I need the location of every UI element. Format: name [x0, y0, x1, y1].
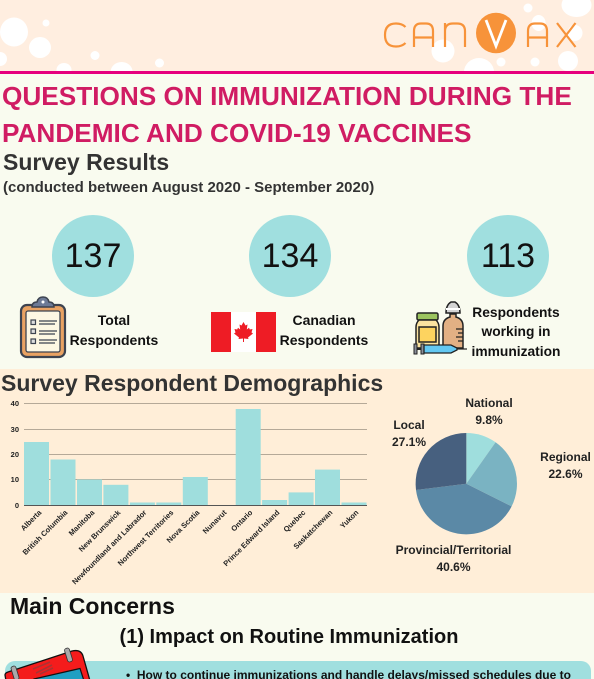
stat: 113 respondents in immunization [467, 215, 549, 297]
pie chart: respondent level: 9.8% [475, 413, 503, 427]
bar chart: respondents by province: 40 [11, 399, 19, 408]
bar chart: respondents by province: 30 [11, 425, 19, 434]
bar chart: respondents by province: Yukon [338, 508, 361, 530]
label: total respondents [70, 312, 158, 348]
heading: demographics: Survey Respondent Demographics [1, 370, 383, 396]
pie chart: respondent level: Regional [540, 450, 591, 464]
bar chart: respondents by province: Northwest Territories [116, 508, 175, 568]
stat: 113 respondents in immunization: 113 [481, 237, 535, 275]
label: canadian respondents: Canadian [292, 312, 356, 328]
bar chart: respondents by province: Manitoba [67, 507, 97, 538]
stat: 137 total respondents: 137 [65, 237, 121, 275]
bar chart: respondents by province: Saskatchewan [291, 508, 335, 551]
bar chart: respondents by province: Ontario [229, 508, 255, 533]
icon: vaccine bottles and syringe [414, 301, 467, 354]
label: respondents working in immunization: immunization [472, 344, 560, 359]
header banner [0, 0, 594, 72]
bar chart: respondents by province: British Columbia [21, 507, 70, 557]
label: respondents working in immunization: Respondents [472, 305, 560, 320]
pie chart: respondent level: 27.1% [392, 435, 426, 449]
header bubbles and Canvax logo [0, 0, 592, 71]
title: QUESTIONS ON IMMUNIZATION DURING THE [2, 81, 572, 111]
stat: 134 canadian respondents [249, 215, 331, 297]
panel: survey respondent demographics [0, 369, 594, 593]
bar chart: respondents by province: Quebec [282, 508, 307, 534]
bar chart: respondents by province: Nova Scotia [165, 507, 202, 545]
bar chart: respondents by province: New Brunswick [77, 507, 123, 554]
pie chart: respondent level: Local [393, 418, 425, 432]
bar chart: respondents by province: 0 [15, 501, 19, 510]
label: total respondents: Total [98, 312, 130, 328]
title [2, 81, 572, 148]
pie chart: respondent level: 40.6% [436, 560, 471, 574]
icon: clipboard [20, 296, 66, 358]
bar chart: respondents by province: Alberta [19, 507, 44, 533]
stat: 137 total respondents [52, 215, 134, 297]
label: respondents working in immunization [472, 305, 560, 359]
icon: calendar [4, 648, 90, 679]
pie chart: respondent level: 22.6% [548, 467, 583, 481]
bar chart: respondents by province: 20 [11, 450, 19, 459]
title: PANDEMIC AND COVID-19 VACCINES [2, 118, 471, 148]
label: canadian respondents: Respondents [280, 332, 368, 348]
bar chart: respondents by province: Nunavut [201, 508, 229, 536]
icon: Canadian flag [211, 312, 276, 352]
label: total respondents: Respondents [70, 332, 158, 348]
pie chart: respondent level: Provincial/Territorial [396, 543, 511, 557]
survey dates: (conducted between August 2020 - September 2020) [3, 179, 374, 196]
heading: main concerns: Main Concerns [10, 593, 175, 619]
bar chart: respondents by province: 10 [11, 475, 19, 484]
subheading: impact on routine immunization: (1) Impact on Routine Immunization [120, 626, 458, 648]
label: respondents working in immunization: working in [482, 324, 550, 339]
bar chart: respondents by province [10, 399, 367, 586]
pie chart: respondent level [392, 396, 591, 574]
bar chart: respondents by province: Newfoundland and Labrador [70, 508, 148, 586]
stat: 134 canadian respondents: 134 [262, 237, 318, 275]
panel: routine immunization concerns [5, 660, 591, 679]
subtitle: survey results: Survey Results [3, 149, 169, 175]
label: canadian respondents [280, 312, 368, 348]
pie chart: respondent level: National [465, 396, 513, 410]
bar chart: respondents by province: Prince Edward Island [221, 508, 282, 568]
header rule [0, 71, 594, 74]
